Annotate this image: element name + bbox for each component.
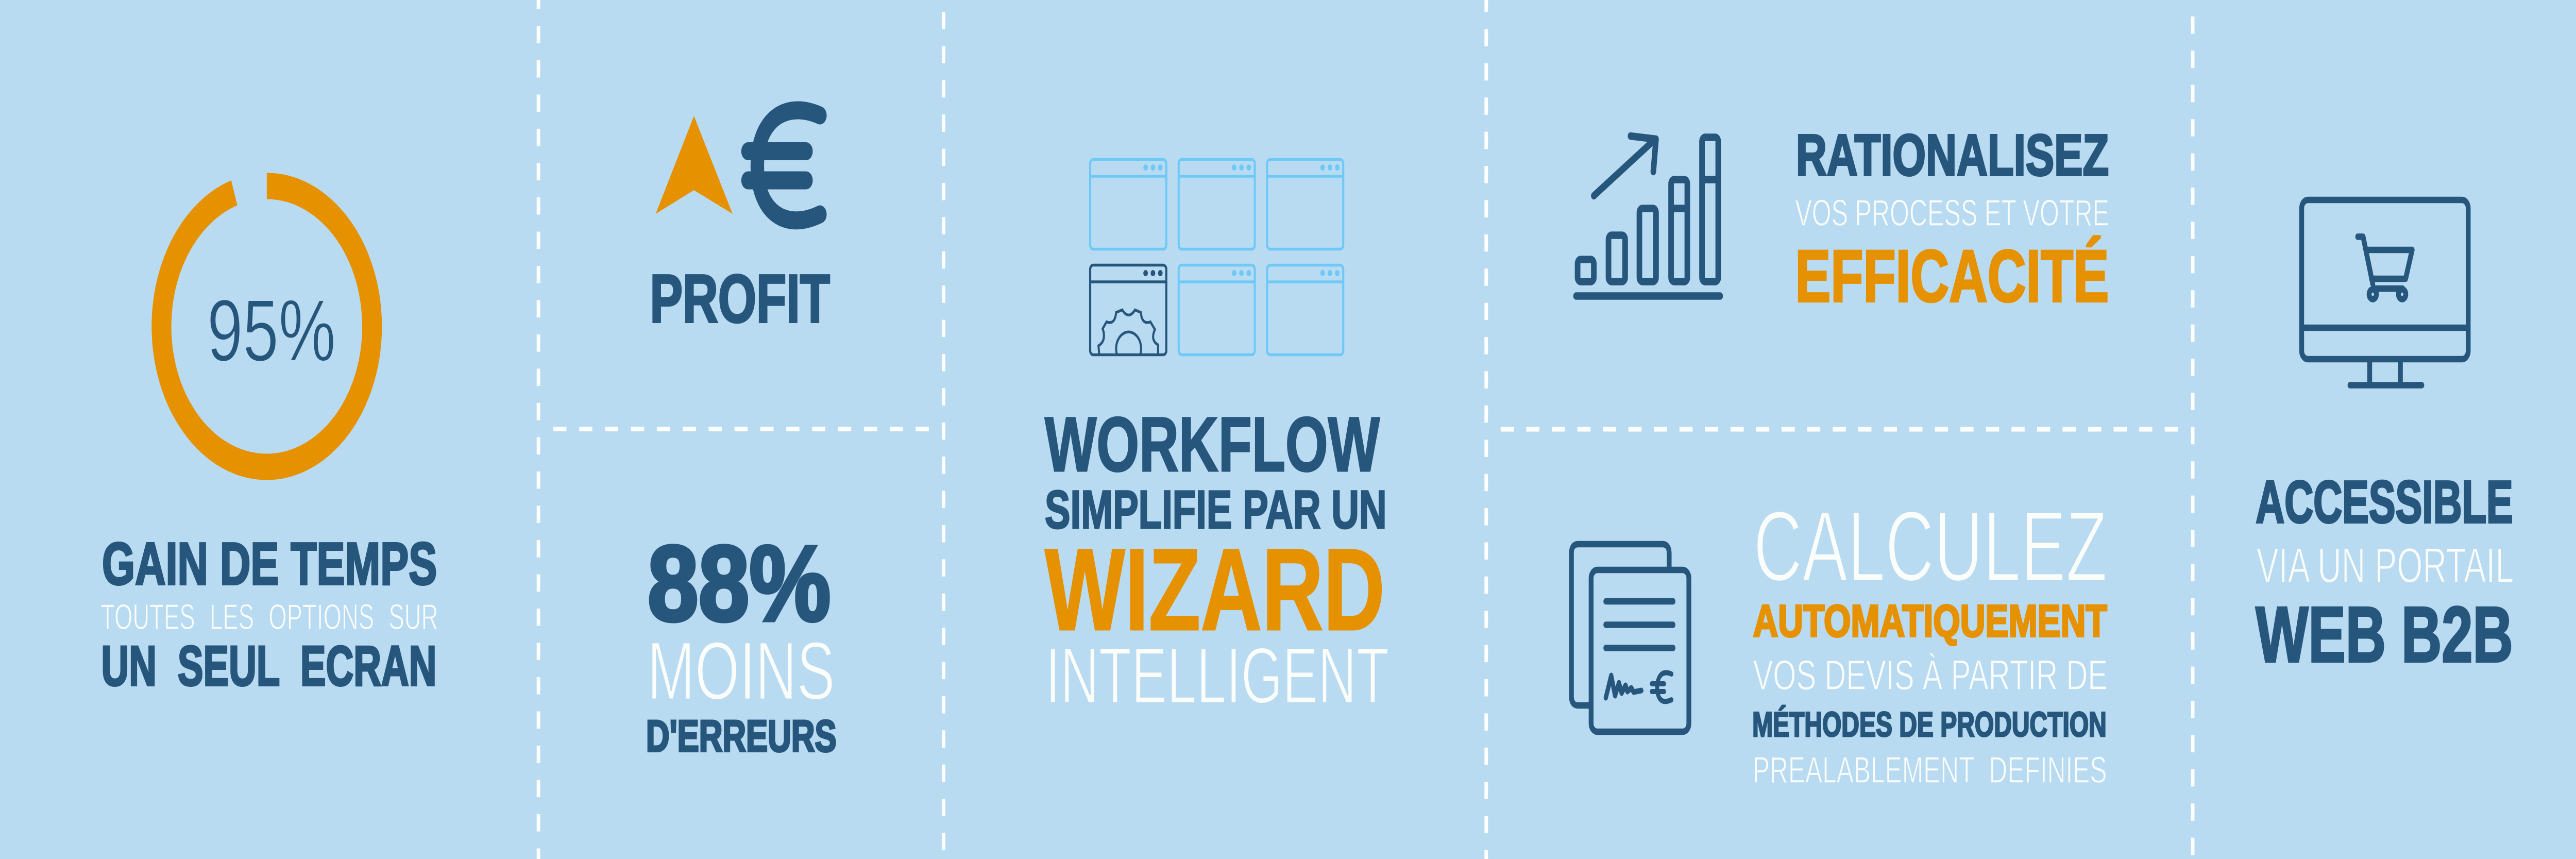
heading: efficacité: EFFICACITÉ (1795, 235, 2109, 317)
panel: moins d'erreurs (646, 524, 837, 761)
icon: documents with signature and euro (1571, 544, 1689, 732)
text: moins: MOINS (647, 625, 835, 717)
panel: profit (650, 110, 830, 336)
heading: rationalisez: RATIONALISEZ (1796, 123, 2109, 188)
panel: rationalisez (1576, 123, 2109, 317)
stat: 88%: 88% (648, 524, 831, 643)
text: d'erreurs: D'ERREURS (646, 712, 837, 761)
text: méthodes de production: MÉTHODES DE PRODUCTION (1752, 705, 2107, 744)
text: toutes les options sur: TOUTES LES OPTIONS SUR (100, 597, 438, 637)
heading: workflow: WORKFLOW (1045, 401, 1380, 488)
text: via un portail: VIA UN PORTAIL (2257, 537, 2514, 593)
icon: active window with gear (1090, 265, 1166, 355)
icon: monitor with shopping cart (2302, 200, 2468, 385)
donut chart: 95% (161, 186, 372, 467)
heading: un seul ecran: UN SEUL ECRAN (101, 634, 436, 698)
panel: workflow wizard (1045, 160, 1389, 720)
icon: window grid (1090, 160, 1343, 355)
heading: web b2b: WEB B2B (2256, 591, 2513, 679)
heading: profit: PROFIT (650, 260, 830, 336)
icon: growth bar chart (1576, 136, 1720, 296)
panel: calculez (1571, 491, 2108, 791)
text: vos process et votre: VOS PROCESS ET VOTRE (1795, 193, 2109, 234)
panel: gain de temps (100, 186, 438, 698)
heading: gain de temps: GAIN DE TEMPS (102, 530, 437, 597)
heading: accessible: ACCESSIBLE (2256, 468, 2513, 535)
icon: orange up arrow (656, 116, 733, 214)
text: prealablement definies: PREALABLEMENT DEFINIES (1753, 750, 2107, 791)
heading: simplifie par un: SIMPLIFIE PAR UN (1045, 479, 1387, 540)
donut value: 95% (207, 281, 336, 379)
icon: shopping cart (2358, 237, 2412, 299)
text: vos devis à partir de: VOS DEVIS À PARTIR DE (1753, 651, 2108, 699)
heading: automatiquement: AUTOMATIQUEMENT (1753, 596, 2107, 646)
text: intelligent: INTELLIGENT (1045, 631, 1389, 720)
heading: wizard: WIZARD (1045, 525, 1385, 655)
panel: accessible (2256, 200, 2514, 679)
icon: euro sign (748, 110, 820, 221)
heading: calculez: CALCULEZ (1753, 491, 2107, 602)
